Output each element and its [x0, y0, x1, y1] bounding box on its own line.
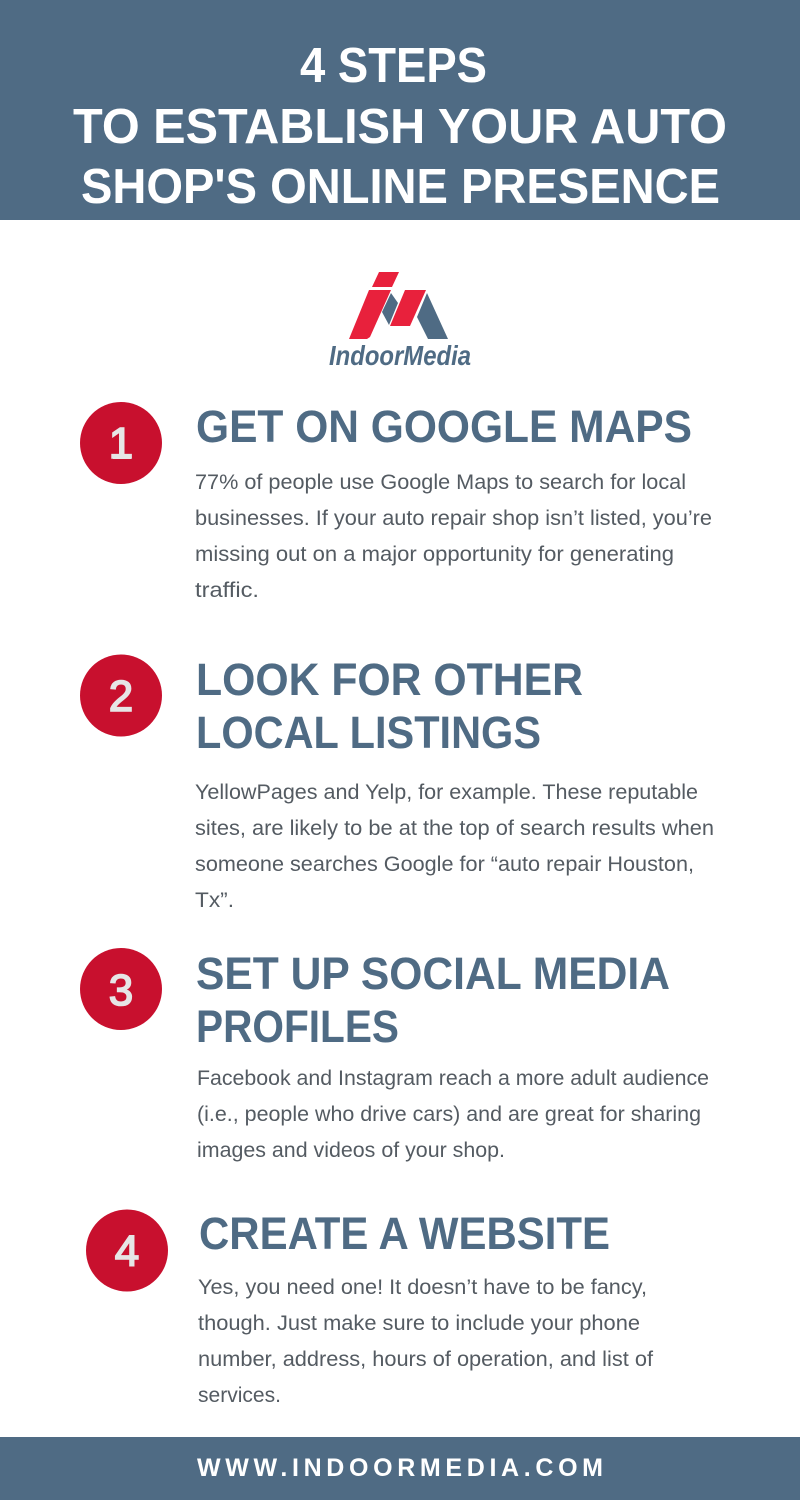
step 3 heading: SET UP SOCIAL MEDIA [196, 948, 670, 999]
logo: IndoorMedia: IndoorMedia [329, 340, 471, 371]
step 4 text: though. Just make sure to include your phone [198, 1311, 640, 1335]
step 3 badge [80, 948, 162, 1030]
step 2 heading [196, 654, 583, 758]
step 2 text: Tx”. [195, 888, 234, 912]
step 2 heading: LOCAL LISTINGS [196, 707, 541, 758]
step 1 heading: GET ON GOOGLE MAPS [196, 401, 692, 452]
step 3 badge: 3 [109, 966, 133, 1015]
step 4 text: number, address, hours of operation, and list of [198, 1347, 653, 1371]
step 1 badge: 1 [109, 419, 133, 468]
step 1 badge [80, 402, 162, 484]
website URL: WWW.INDOORMEDIA.COM [197, 1454, 603, 1482]
step 3 text: images and videos of your shop. [197, 1138, 505, 1162]
footer band [0, 1437, 800, 1500]
step 2 text: sites, are likely to be at the top of search results when [195, 816, 714, 840]
step 3 text: (i.e., people who drive cars) and are great for sharing [197, 1102, 701, 1126]
step 2 heading: LOOK FOR OTHER [196, 654, 583, 705]
step 2 text: someone searches Google for “auto repair Houston, [195, 852, 694, 876]
step 1 text [195, 470, 712, 602]
title: TO ESTABLISH YOUR AUTO [73, 100, 727, 154]
title: SHOP'S ONLINE PRESENCE [81, 160, 720, 214]
step 4 badge [86, 1210, 168, 1292]
step 3 text: Facebook and Instagram reach a more adult audience [197, 1066, 709, 1090]
step 4 text: Yes, you need one! It doesn’t have to be fancy, [198, 1275, 647, 1299]
step 3 heading [196, 948, 670, 1052]
logo: IndoorMedia [329, 272, 471, 371]
step 2 text: YellowPages and Yelp, for example. These reputable [195, 780, 698, 804]
step 1 text: businesses. If your auto repair shop isn’t listed, you’re [195, 506, 712, 530]
title: 4 STEPS [300, 39, 487, 93]
step 2 badge: 2 [109, 672, 133, 721]
step 4 badge: 4 [115, 1227, 139, 1276]
step 1 text: missing out on a major opportunity for generating [195, 542, 674, 566]
title [73, 39, 727, 214]
step 1 text: 77% of people use Google Maps to search for local [195, 470, 686, 494]
step 4 heading: CREATE A WEBSITE [199, 1208, 610, 1259]
step 4 text: services. [198, 1383, 281, 1407]
step 3 text [197, 1066, 709, 1162]
step 2 text [195, 780, 714, 912]
step 2 badge [80, 654, 162, 736]
step 4 text [198, 1275, 653, 1407]
step 3 heading: PROFILES [196, 1001, 399, 1052]
header band [0, 0, 800, 220]
step 1 text: traffic. [195, 578, 259, 602]
